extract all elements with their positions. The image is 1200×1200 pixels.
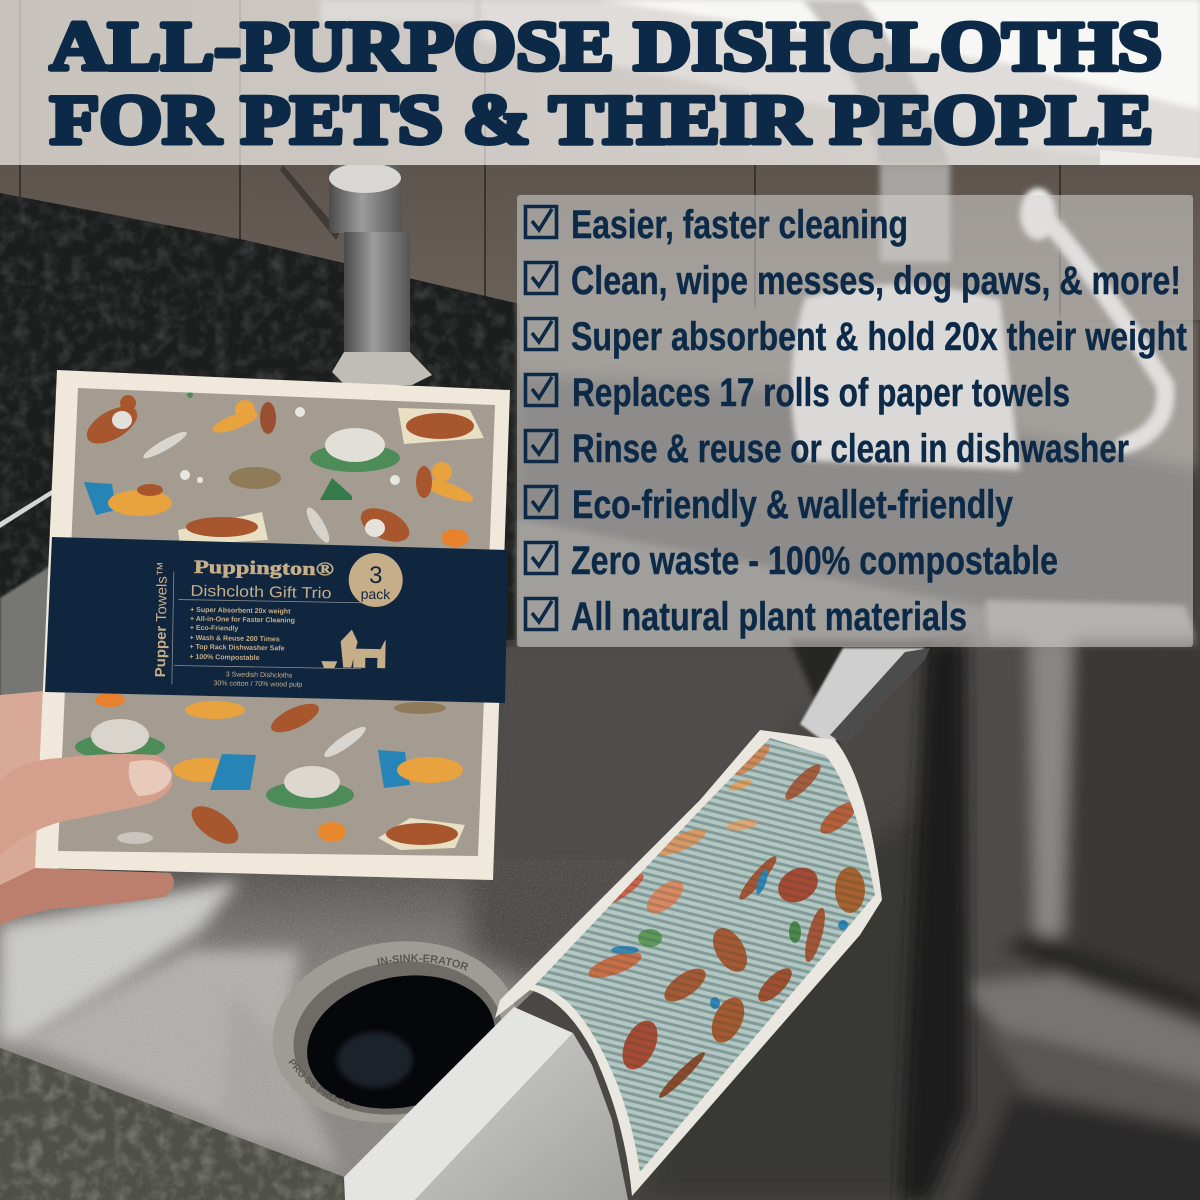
vertical brand: Pupper Towels™ xyxy=(153,561,171,677)
bottom pets xyxy=(95,693,125,707)
drain with flange text: PRO SS PRO SS xyxy=(288,1058,351,1108)
back of sink seen through panel xyxy=(517,300,1200,640)
drain with flange text xyxy=(272,941,515,1123)
thumb xyxy=(0,754,172,855)
dog prints on cloth xyxy=(536,738,875,1170)
feature bullets: + All-in-One for Faster Cleaning xyxy=(190,616,295,625)
far countertop xyxy=(0,193,520,640)
feature bullets xyxy=(189,607,295,663)
checklist item 4: Replaces 17 rolls of paper towels xyxy=(572,371,1070,415)
3 pack badge: pack xyxy=(361,586,391,602)
composition note: 3 Swedish Dishcloths xyxy=(226,671,293,680)
icon: dog and cat logo xyxy=(321,629,386,669)
checklist item 8: All natural plant materials xyxy=(571,595,967,639)
title: ALL-PURPOSE DISHCLOTHS xyxy=(50,8,1162,86)
feature bullets: + Super Absorbent 20x weight xyxy=(190,607,291,616)
corner shadow xyxy=(900,640,968,1200)
top pets xyxy=(86,407,138,444)
checklist item 7: Zero waste - 100% compostable xyxy=(571,539,1058,583)
checklist item 1: Easier, faster cleaning xyxy=(571,203,908,247)
wall tiles xyxy=(0,0,1200,320)
drain with flange text: IN-SINK-ERATOR xyxy=(377,954,468,971)
feature bullets: + 100% Compostable xyxy=(189,654,260,662)
band label content xyxy=(153,549,403,690)
3 pack badge xyxy=(348,553,403,607)
feature bullets: + Eco-Friendly xyxy=(190,625,238,633)
feature bullets: + Top Rack Dishwasher Safe xyxy=(189,644,285,652)
sink rim xyxy=(415,1033,628,1200)
composition note: 30% cotton / 70% wood pulp xyxy=(213,680,302,689)
composition note xyxy=(213,671,303,689)
soap dispenser xyxy=(280,163,432,385)
right wall xyxy=(930,640,1200,1200)
granite foreground xyxy=(0,1048,345,1200)
faucet through panel xyxy=(791,165,1166,470)
3 pack badge: 3 xyxy=(369,562,383,589)
sink floor xyxy=(0,860,638,1177)
white dishcloth card xyxy=(35,370,510,880)
sink basin left wall xyxy=(480,647,960,1200)
thumbnail xyxy=(129,760,172,796)
navy paper band xyxy=(45,537,508,703)
checklist item 6: Eco-friendly & wallet-friendly xyxy=(572,483,1014,527)
product name: Dishcloth Gift Trio xyxy=(190,583,332,602)
hand behind card xyxy=(0,691,60,925)
panel: feature checklist xyxy=(517,195,1193,647)
title xyxy=(50,8,1162,159)
brand name: Puppington® xyxy=(194,557,334,580)
title band xyxy=(0,0,1200,165)
lower finger xyxy=(0,868,174,925)
title: FOR PETS & THEIR PEOPLE xyxy=(50,82,1153,159)
dishcloth pack held in hand xyxy=(0,370,510,925)
left sink edge xyxy=(0,488,55,528)
pet pattern xyxy=(75,392,484,851)
grey printed area xyxy=(58,388,495,856)
draped dishcloth on sink edge xyxy=(495,720,890,1196)
feature bullets: + Wash & Reuse 200 Times xyxy=(190,635,280,643)
